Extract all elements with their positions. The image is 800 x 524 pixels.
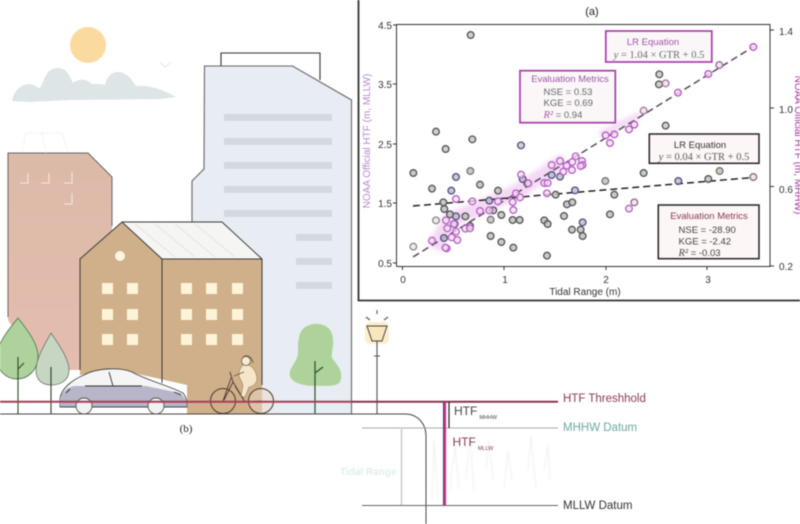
left axis tick labels: 0.5 (378, 259, 392, 270)
line: tidal range bar (400, 429, 402, 505)
x axis tick labels: 1 (502, 275, 508, 286)
regression line: MHHW (413, 178, 753, 206)
tower window stripes (224, 114, 332, 289)
x axis tick labels: 0 (400, 275, 406, 286)
bar: HTF MHHW (448, 402, 450, 428)
pink points lower (410, 153, 757, 252)
ground outline (0, 414, 426, 524)
panel: city scene (0, 27, 389, 414)
callout: evaluation metrics MLLW: NSE = 0.53 (544, 87, 592, 98)
icon: green tree (0, 318, 38, 414)
plot axes (396, 24, 770, 266)
chart: scatter plot (362, 21, 800, 298)
grey points lower (410, 168, 723, 259)
icon: bird (160, 62, 171, 67)
x axis tick labels: 3 (705, 275, 711, 286)
left axis tick labels (378, 21, 392, 270)
pink points upper (602, 44, 757, 146)
left axis tick labels: 2.5 (378, 140, 392, 151)
callout: evaluation metrics MLLW: Evaluation Metrics (531, 74, 609, 85)
x axis title: Tidal Range (m) (549, 287, 621, 298)
left axis tick labels: 3.5 (378, 80, 392, 91)
panel: scatter frame (358, 0, 800, 300)
label: HTF MLLW: HTF (452, 435, 476, 449)
right axis tick labels (779, 27, 793, 273)
label: HTF threshold: HTF Threshhold (563, 393, 646, 405)
x axis tick labels (400, 275, 711, 286)
building: pink block (8, 133, 112, 370)
line: MLLW datum (362, 504, 558, 506)
regression line: MLLW (413, 47, 753, 257)
faint tidal waves (432, 436, 550, 500)
panel: datum diagram (0, 393, 646, 512)
line: HTF threshold (0, 401, 558, 403)
icon: cyclist (210, 356, 274, 414)
label: HTF MHHW: MHHW (479, 415, 498, 421)
right axis tick labels: 0.6 (779, 185, 793, 196)
bar: HTF MLLW (444, 402, 445, 505)
icon: round bush tree (290, 324, 341, 414)
line: MHHW datum (362, 427, 558, 429)
label: MLLW datum: MLLW Datum (563, 500, 632, 512)
label: (b): (b) (180, 423, 193, 435)
icon: grey-green tree (36, 333, 69, 414)
callout: evaluation metrics MLLW: R² = 0.94 (542, 110, 582, 121)
grey points upper (433, 32, 669, 152)
callout: evaluation metrics MHHW (658, 205, 759, 259)
right axis tick labels: 0.2 (779, 262, 793, 273)
callout: LR equation MLLW: LR Equation (627, 37, 679, 48)
callout: evaluation metrics MLLW (520, 71, 615, 123)
label: tidal range: Tidal Range (340, 467, 397, 478)
label: HTF MLLW: MLLW (478, 446, 494, 452)
callout: evaluation metrics MHHW: R² = -0.03 (678, 248, 721, 259)
building: tall grey tower (192, 53, 352, 414)
pink glow around MLLW points (434, 115, 640, 248)
building: tan house (80, 222, 262, 414)
callout: evaluation metrics MHHW: KGE = -2.42 (678, 236, 731, 248)
left y axis title: NOAA Official HTF (m, MLLW) (362, 74, 373, 208)
callout: evaluation metrics MHHW: NSE = -28.90 (678, 225, 736, 236)
callout: LR equation MHHW (649, 134, 759, 163)
right axis tick labels: 1.0 (779, 105, 793, 116)
icon: sun (70, 27, 106, 63)
left axis tick labels: 1.5 (378, 199, 392, 210)
icon: cloud (12, 68, 176, 102)
x axis tick labels: 2 (603, 275, 609, 286)
callout: LR equation MHHW: LR Equation (674, 140, 726, 151)
left axis tick labels: 4.5 (378, 21, 392, 32)
label: MHHW datum: MHHW Datum (563, 422, 637, 434)
callout: LR equation MLLW: y = 1.04 × GTR + 0.5 (613, 50, 704, 61)
icon: car (60, 369, 187, 414)
axis ticks (393, 25, 774, 270)
callout: evaluation metrics MHHW: Evaluation Metrics (670, 211, 748, 222)
right axis tick labels: 1.4 (779, 27, 793, 38)
icon: street lamp (365, 310, 389, 414)
callout: LR equation MLLW (606, 31, 712, 62)
house windows (102, 283, 243, 345)
panel title (a): (a) (585, 6, 599, 18)
callout: LR equation MHHW: y = 0.04 × GTR + 0.5 (658, 152, 749, 163)
label: HTF MHHW: HTF (454, 404, 477, 418)
callout: evaluation metrics MLLW: KGE = 0.69 (544, 98, 593, 109)
